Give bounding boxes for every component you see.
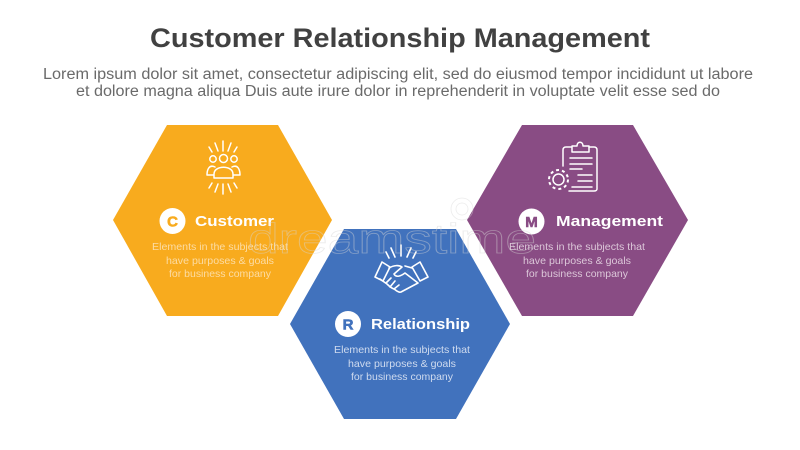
blue hexagon (290, 229, 510, 419)
badge: M: M (525, 214, 538, 231)
body text: customer: have purposes & goals (166, 255, 274, 267)
panel: management (467, 125, 688, 316)
badge: R (335, 311, 361, 337)
panel: relationship (290, 229, 510, 419)
body text: management: for business company (526, 268, 629, 280)
icon: clipboard and gear (549, 142, 597, 191)
body text: management: Elements in the subjects that (509, 241, 645, 253)
watermark (248, 198, 536, 262)
yellow hexagon (113, 125, 332, 316)
heading: Relationship: Relationship (371, 316, 470, 333)
body text: relationship: for business company (351, 371, 454, 383)
subtitle text: et dolore magna aliqua Duis aute irure dolor in reprehenderit in voluptate velit esse sed do (76, 83, 720, 100)
body text: relationship: Elements in the subjects that (334, 344, 470, 356)
body text: relationship: have purposes & goals (348, 358, 456, 370)
subtitle text: Lorem ipsum dolor sit amet, consectetur adipiscing elit, sed do eiusmod tempor incididunt ut labore (43, 66, 753, 83)
body text: relationship (334, 344, 470, 383)
icon: handshake (375, 245, 428, 292)
panel: customer (113, 125, 332, 316)
badge: C (160, 208, 186, 234)
body text: customer (152, 241, 288, 280)
subtitle text (43, 66, 753, 100)
icon: customer group (207, 141, 240, 194)
title: Customer Relationship Management (150, 23, 650, 53)
body text: management (509, 241, 645, 280)
heading: Customer: Customer (195, 213, 274, 230)
body text: management: have purposes & goals (523, 255, 631, 267)
watermark: dreamstime (248, 215, 536, 262)
purple hexagon (467, 125, 688, 316)
body text: customer: for business company (169, 268, 272, 280)
heading: Management: Management (556, 213, 663, 230)
body text: customer: Elements in the subjects that (152, 241, 288, 253)
badge: M (518, 208, 544, 234)
badge: C: C (167, 214, 178, 230)
badge: R: R (343, 316, 354, 334)
